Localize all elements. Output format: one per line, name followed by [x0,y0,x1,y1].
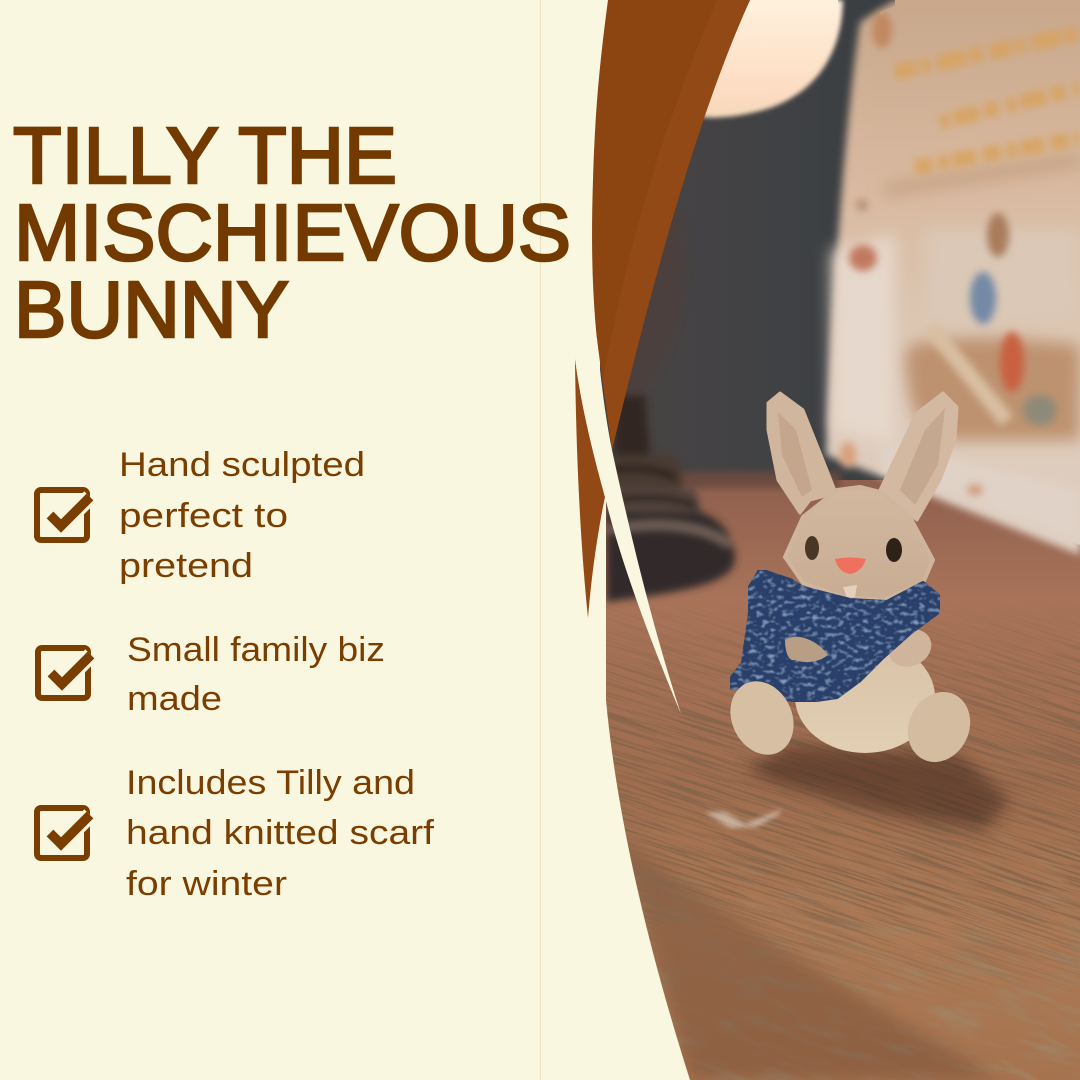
text: hand sculpted: Hand sculpted [119,446,365,484]
bunny nose [835,558,866,574]
bunny right foot [897,682,981,772]
list item 3 [37,764,435,903]
bunny right ear [880,393,957,520]
text: small family biz: made [127,680,222,718]
bunny head [785,487,933,600]
text: includes tilly: for winter [126,865,287,903]
text: includes tilly [126,764,435,903]
bunny eyes [805,536,819,560]
list item 2 [38,631,385,718]
title: MISCHIEVOUS [14,188,571,277]
curved brown ribbon upper [592,0,750,450]
panel: cream background with curved edge [0,0,690,1080]
bunny figurine [719,393,981,772]
photo soft wood mottling [658,892,1080,1080]
photo lamp shade [690,0,843,118]
text: includes tilly: hand knitted scarf [126,814,435,852]
photo wood grain [606,628,1080,982]
photo table shadow [745,745,1010,830]
photo white mark [705,809,782,828]
text: hand sculpted: perfect to [119,497,288,535]
bunny right arm [882,622,938,674]
title [13,111,571,354]
text: small family biz: Small family biz [127,631,385,669]
icon: checkbox 2 [38,648,91,698]
icon: checkbox 1 [37,490,90,540]
bunny left foot [719,671,805,765]
photo book [826,0,1080,555]
divider line [540,0,541,1080]
photo table [600,472,1080,1080]
cream sliver [575,338,681,714]
photo wall [600,0,1080,500]
text: includes tilly: Includes Tilly and [126,764,415,802]
list item 1 [37,446,365,585]
bunny left arm [785,637,828,662]
text: small family biz [127,631,385,718]
text: hand sculpted: pretend [119,547,253,585]
icon: checkbox 3 [37,808,90,858]
text: hand sculpted [119,446,365,585]
bunny left ear [768,393,836,513]
bunny scarf [730,570,940,702]
photo dark plank band [618,838,1000,1080]
curved brown ribbon lower [575,358,605,618]
bunny tooth [843,585,857,598]
photo: bunny on wooden table [600,0,1080,1080]
title: TILLY THE [13,111,397,200]
title: BUNNY [14,265,289,354]
bunny body [795,641,935,753]
photo lamp [606,199,735,602]
